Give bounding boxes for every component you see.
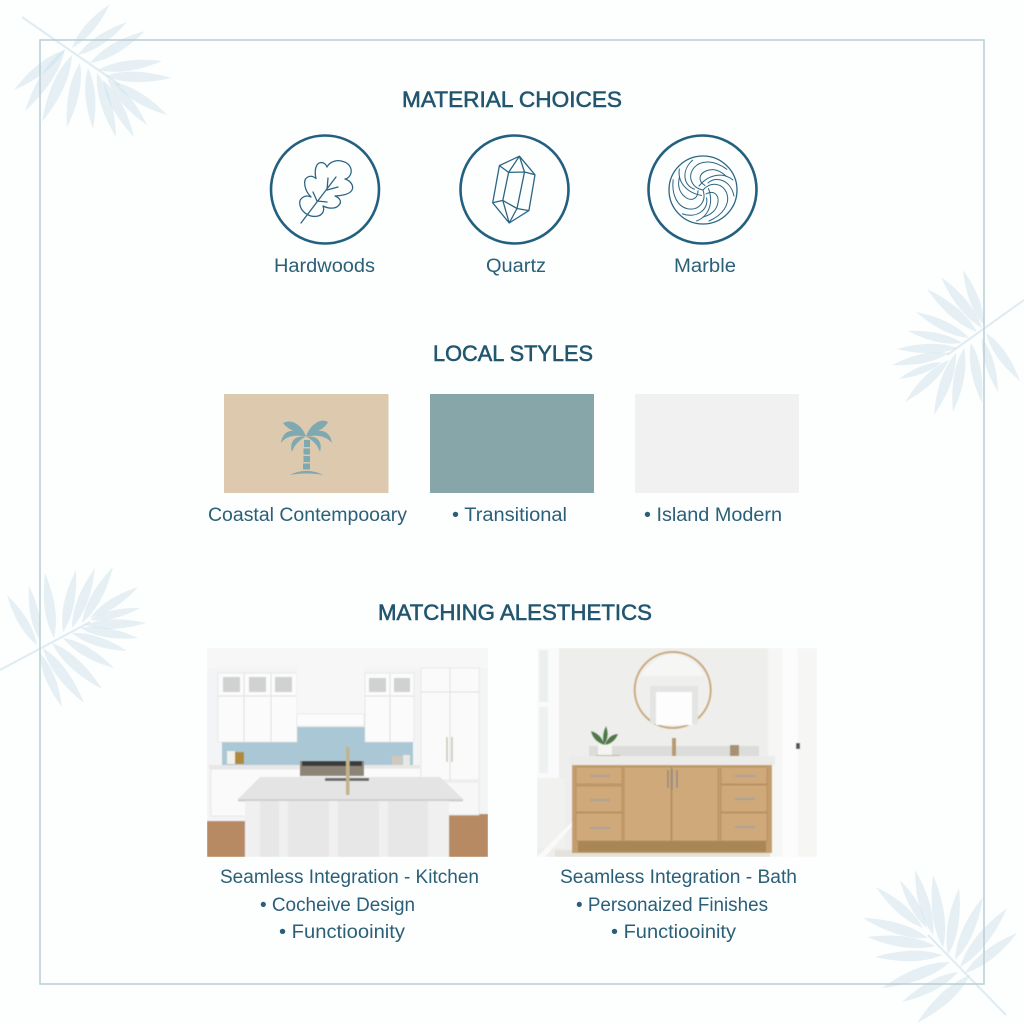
label: hardwoods: Hardwoods	[274, 256, 375, 277]
panel: material choices	[271, 87, 756, 277]
caption: kitchen: Seamless Integration - Kitchen	[220, 867, 479, 888]
label: coastal contempooary: Coastal Contempooary	[208, 505, 408, 526]
swatch: coastal contemporary with palm icon	[224, 394, 388, 493]
caption: kitchen	[220, 867, 479, 943]
photo: white kitchen	[207, 648, 488, 857]
label: marble: Marble	[674, 256, 736, 277]
swatch: island modern	[635, 394, 799, 493]
heading: matching alesthetics: MATCHING ALESTHETICS	[378, 600, 652, 625]
palm frond: right	[891, 268, 1024, 417]
palm frond: top left	[11, 1, 171, 139]
swatch: transitional	[430, 394, 594, 493]
caption: kitchen: • Cocheive Design	[260, 895, 415, 916]
label: quartz: Quartz	[486, 256, 546, 277]
icon: quartz crystal	[460, 136, 568, 244]
icon: marble swirl	[648, 136, 756, 244]
panel: matching aesthetics	[207, 600, 817, 943]
palm frond: bottom right	[861, 869, 1020, 1024]
caption: kitchen: • Functiooinity	[279, 922, 406, 943]
label: island modern: • Island Modern	[644, 505, 782, 526]
caption: bath: • Personaized Finishes	[576, 895, 768, 916]
caption: bath	[560, 867, 797, 943]
photo: oak bathroom vanity	[537, 648, 817, 857]
heading: local styles: LOCAL STYLES	[433, 341, 593, 366]
palm frond: left	[0, 565, 146, 709]
heading: material choices: MATERIAL CHOICES	[402, 87, 622, 112]
panel: local styles	[208, 341, 799, 526]
label: transitional: • Transitional	[452, 505, 567, 526]
caption: bath: • Functiooinity	[611, 922, 737, 943]
icon: oak leaf	[271, 136, 379, 244]
caption: bath: Seamless Integration - Bath	[560, 867, 797, 888]
